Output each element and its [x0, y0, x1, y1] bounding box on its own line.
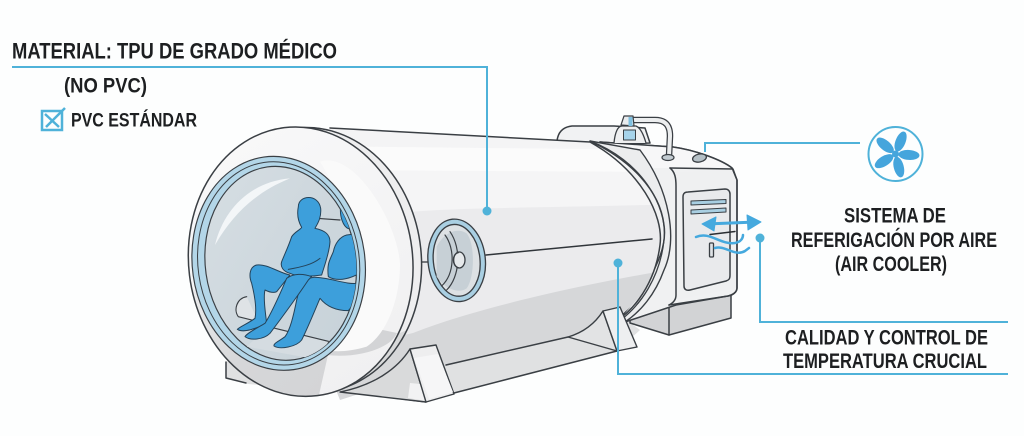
side viewport	[424, 216, 489, 304]
base plate under chamber	[226, 300, 640, 402]
front seated person	[237, 197, 330, 339]
pipe and valve on top of housing	[614, 116, 674, 160]
subheading: no PVC: (NO PVC)	[64, 74, 147, 98]
housing main shell	[600, 142, 737, 322]
bench	[236, 218, 340, 360]
cooler front face	[676, 170, 736, 300]
cooler access panel	[683, 189, 730, 290]
housing top hump	[557, 126, 650, 145]
body lower edge and base rails	[446, 337, 617, 393]
leader line: temperature from cooler	[756, 234, 1008, 322]
label: quality and temperature control	[783, 326, 988, 373]
heading: material: MATERIAL: TPU DE GRADO MÉDICO	[12, 38, 337, 64]
rear housing with air cooler	[557, 126, 737, 335]
hyperbaric chamber illustration	[173, 114, 761, 420]
label: air cooling system: SISTEMA DE	[844, 204, 946, 228]
airflow arrows	[696, 215, 761, 253]
front end ring	[188, 126, 422, 398]
cylinder body	[329, 127, 672, 400]
front support foot	[340, 345, 454, 402]
icon: fan	[868, 127, 922, 181]
rear support foot	[568, 307, 637, 351]
vent slots	[691, 200, 726, 214]
leader line: air cooler	[705, 143, 860, 152]
leader line: material	[12, 67, 492, 216]
icon: crossed checkbox	[42, 108, 65, 130]
rear seated person	[274, 203, 360, 348]
label: air cooling system: (AIR COOLER)	[835, 252, 947, 276]
ring lower shading	[193, 290, 397, 396]
label: air cooling system	[791, 204, 997, 276]
glass highlight	[215, 178, 290, 245]
leader line: temperature from body	[614, 258, 1008, 374]
panel switch	[710, 243, 714, 257]
circular window with blue frame	[191, 156, 366, 371]
housing base	[630, 290, 731, 335]
seam line	[486, 239, 652, 255]
label: standard PVC: PVC ESTÁNDAR	[71, 110, 197, 132]
air cooler knob	[692, 153, 707, 163]
